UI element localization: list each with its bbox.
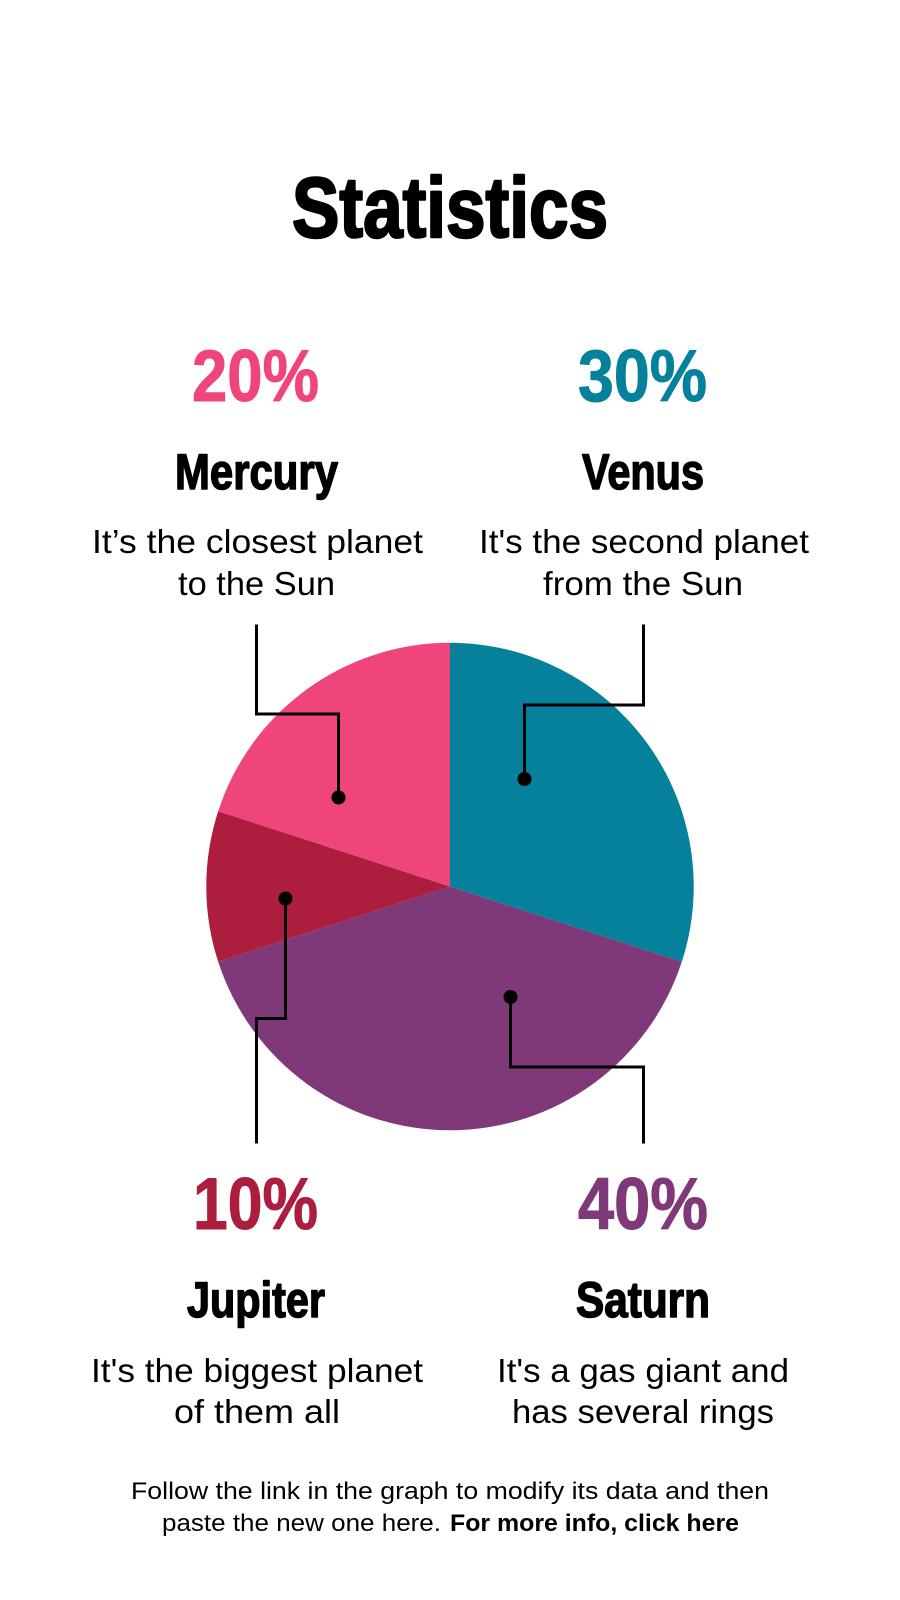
footer note: paste the new one here. bbox=[162, 1510, 441, 1537]
connector: Venus bbox=[518, 624, 644, 786]
Mercury percentage: 20% bbox=[192, 336, 319, 417]
Saturn percentage: 40% bbox=[578, 1164, 708, 1245]
connector: Jupiter bbox=[256, 892, 292, 1144]
Saturn description: has several rings bbox=[512, 1393, 774, 1430]
footer note: For more info, click here bbox=[450, 1510, 739, 1537]
Venus description: It's the second planet bbox=[479, 523, 809, 560]
connector: Saturn bbox=[504, 990, 644, 1144]
Saturn description: It's a gas giant and bbox=[497, 1352, 789, 1389]
Mercury description: It’s the closest planet bbox=[92, 523, 423, 560]
Saturn heading: Saturn bbox=[576, 1272, 710, 1328]
title: Statistics bbox=[292, 161, 608, 256]
slice: Venus 30% bbox=[450, 643, 694, 962]
Venus percentage: 30% bbox=[578, 336, 707, 417]
Mercury heading: Mercury bbox=[175, 444, 338, 500]
slice: Saturn 40% bbox=[218, 886, 682, 1130]
slice: Jupiter 10% bbox=[206, 811, 450, 962]
panel: Jupiter bbox=[91, 1164, 423, 1430]
Venus heading: Venus bbox=[582, 444, 704, 500]
pie chart bbox=[206, 643, 694, 1130]
footer note: Follow the link in the graph to modify its data and then bbox=[131, 1478, 769, 1505]
connector: Mercury bbox=[256, 624, 346, 804]
panel: Mercury bbox=[92, 336, 423, 602]
Saturn description bbox=[497, 1352, 789, 1430]
Mercury description bbox=[92, 523, 423, 602]
slice: Mercury 20% bbox=[218, 643, 450, 886]
footer note bbox=[131, 1478, 769, 1537]
Venus description bbox=[479, 523, 809, 602]
Jupiter percentage: 10% bbox=[193, 1164, 318, 1245]
panel: Venus bbox=[479, 336, 809, 602]
Jupiter description: It's the biggest planet bbox=[91, 1352, 423, 1389]
Mercury description: to the Sun bbox=[178, 565, 335, 602]
Jupiter heading: Jupiter bbox=[187, 1272, 325, 1328]
Venus description: from the Sun bbox=[543, 565, 743, 602]
panel: Saturn bbox=[497, 1164, 789, 1430]
Jupiter description bbox=[91, 1352, 423, 1430]
Jupiter description: of them all bbox=[174, 1393, 340, 1430]
